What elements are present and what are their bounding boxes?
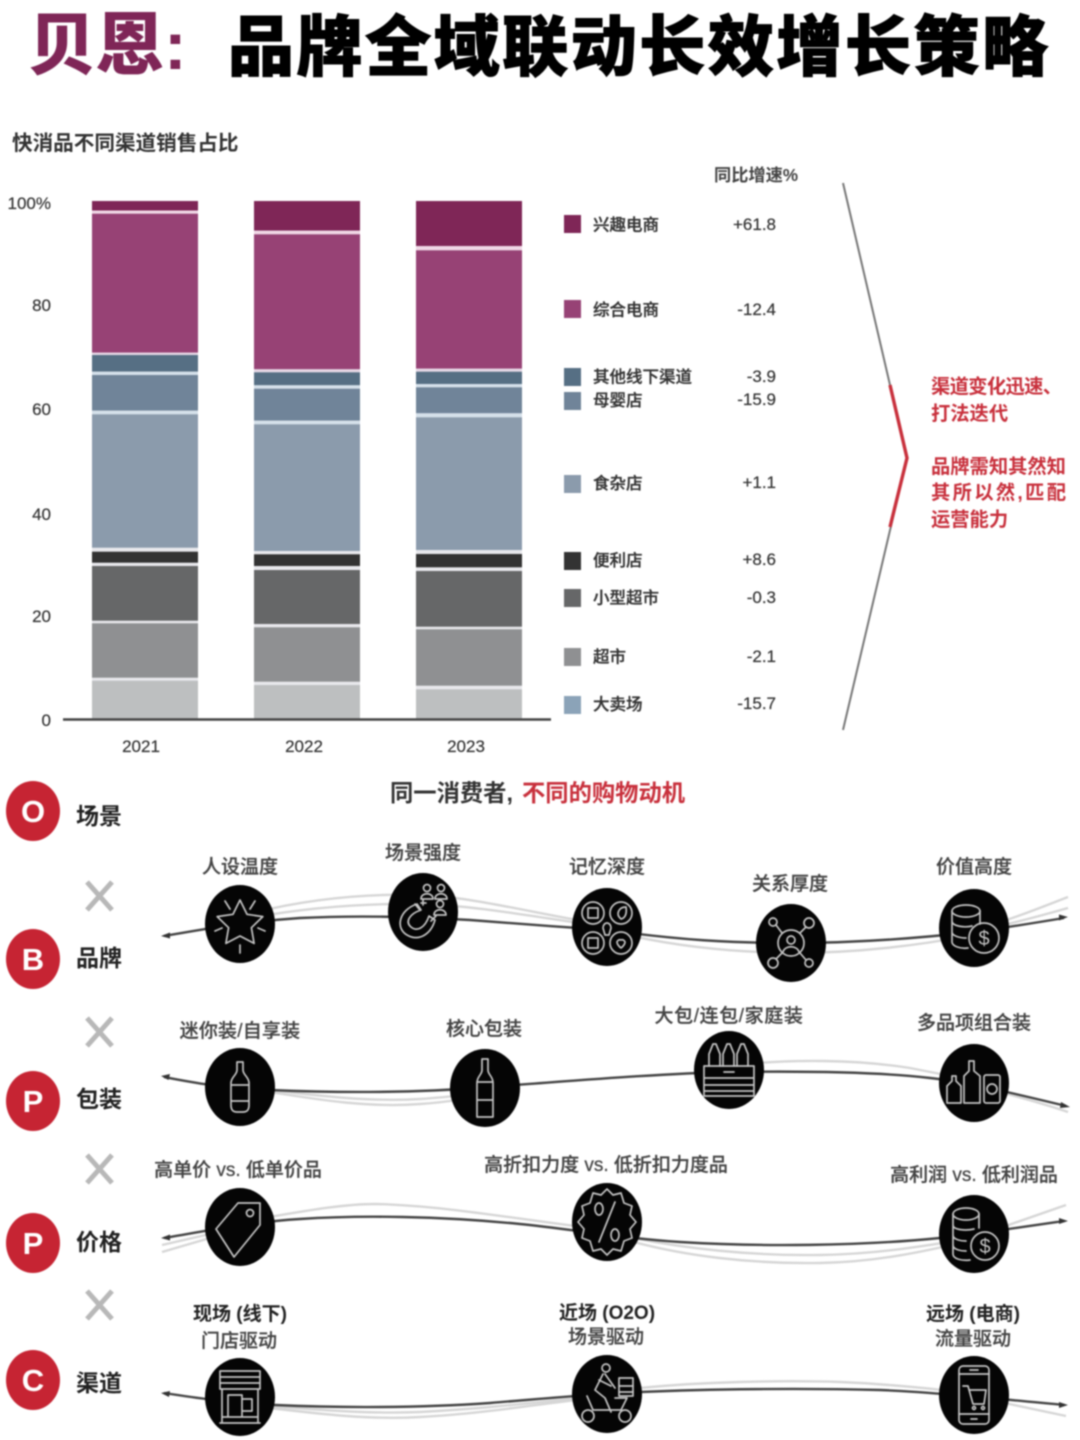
legend and growth rates: 其他线下渠道 xyxy=(593,368,692,386)
legend and growth rates: -15.7 xyxy=(737,694,776,713)
legend and growth rates: -0.3 xyxy=(747,588,776,607)
node: price tag xyxy=(154,1159,322,1266)
callout: 其所以然,匹配 xyxy=(931,481,1066,504)
node: memory depth xyxy=(569,856,645,966)
node: discount badge: 高折扣力度 vs. 低折扣力度品 xyxy=(484,1154,728,1176)
node: scene strength: 场景强度 xyxy=(385,842,461,864)
row: brand xyxy=(161,842,1068,982)
flow curves xyxy=(161,895,1068,953)
x axis: 2022 xyxy=(285,737,323,756)
legend and growth rates: 大卖场 xyxy=(593,695,642,714)
factor C: C xyxy=(22,1363,44,1398)
node: core pack xyxy=(446,1018,522,1127)
node: phone shopping cart: 远场 (电商) xyxy=(926,1303,1020,1325)
node: scene strength xyxy=(385,842,461,951)
node: mini pack: 迷你装/自享装 xyxy=(180,1020,300,1042)
factor O: 场景 xyxy=(76,803,122,829)
multiply mark xyxy=(87,1018,112,1046)
y axis labels: 100% xyxy=(8,194,51,213)
flow curves xyxy=(161,1061,1070,1112)
node: value height xyxy=(936,856,1012,967)
legend and growth rates: 同比增速% xyxy=(714,165,798,185)
multiply mark xyxy=(87,882,112,910)
node: delivery scooter: 场景驱动 xyxy=(568,1326,644,1348)
panel: OBPPC factor column xyxy=(6,781,122,1410)
node: relationship thickness xyxy=(752,873,828,982)
multiply mark xyxy=(87,1155,112,1183)
callout: 渠道变化迅速、 xyxy=(931,375,1062,398)
y axis labels: 80 xyxy=(32,296,51,315)
node: core pack: 核心包装 xyxy=(446,1018,522,1040)
node: profit coins xyxy=(890,1164,1058,1273)
title: 品牌全域联动长效增长策略 xyxy=(228,10,1048,84)
node: mini pack xyxy=(180,1020,300,1126)
factor C xyxy=(6,1350,122,1410)
factor P price: P xyxy=(23,1226,43,1261)
node: store xyxy=(193,1303,287,1436)
y axis labels: 60 xyxy=(32,400,51,419)
legend and growth rates: -15.9 xyxy=(737,390,776,409)
stacked bar 2022 xyxy=(254,201,360,719)
factor O: O xyxy=(21,794,45,829)
y axis labels: 40 xyxy=(32,505,51,524)
node: delivery scooter xyxy=(559,1302,655,1433)
factor P package xyxy=(6,1071,122,1131)
chart heading: 快消品不同渠道销售占比 xyxy=(12,132,239,155)
node: relationship thickness: 关系厚度 xyxy=(752,873,828,895)
y axis labels xyxy=(8,194,51,730)
legend and growth rates: 兴趣电商 xyxy=(593,216,659,234)
callout: 打法迭代 xyxy=(931,403,1008,425)
node: store: 门店驱动 xyxy=(201,1330,277,1352)
legend and growth rates: 综合电商 xyxy=(593,300,659,320)
node: persona warmth xyxy=(202,856,278,963)
y axis labels: 20 xyxy=(32,607,51,626)
node: value height: 价值高度 xyxy=(936,856,1012,878)
node: value height: $ xyxy=(978,928,990,950)
legend and growth rates: 超市 xyxy=(593,648,626,666)
y axis labels: 0 xyxy=(42,711,51,730)
factor B xyxy=(6,929,122,989)
factor P price: 价格 xyxy=(76,1229,122,1255)
legend and growth rates: -12.4 xyxy=(737,300,776,319)
callout xyxy=(931,375,1066,531)
node: profit coins: $ xyxy=(979,1236,991,1258)
flow curves xyxy=(161,1204,1068,1263)
node: price tag: 高单价 vs. 低单价品 xyxy=(154,1159,322,1181)
factor B: 品牌 xyxy=(76,945,122,971)
panel heading: shopping motive: 同一消费者, xyxy=(390,780,513,806)
callout: 品牌需知其然知 xyxy=(931,455,1066,478)
node: persona warmth: 人设温度 xyxy=(202,856,278,878)
legend and growth rates: +1.1 xyxy=(742,473,776,492)
flow curves xyxy=(161,1381,1068,1418)
stacked bar 2023 xyxy=(416,201,522,719)
bracket arrow xyxy=(843,183,907,730)
node: phone shopping cart xyxy=(926,1303,1020,1434)
row: package xyxy=(161,1005,1070,1127)
legend and growth rates: 食杂店 xyxy=(593,473,642,493)
legend and growth rates: +61.8 xyxy=(733,215,776,234)
node: store: 现场 (线下) xyxy=(193,1303,287,1325)
legend and growth rates: -2.1 xyxy=(747,647,776,666)
legend and growth rates xyxy=(564,165,798,714)
node: memory depth: 记忆深度 xyxy=(569,856,645,878)
node: family pack: 大包/连包/家庭装 xyxy=(655,1005,803,1027)
panel heading: shopping motive xyxy=(390,780,686,806)
node: phone shopping cart: 流量驱动 xyxy=(935,1328,1011,1350)
legend and growth rates: +8.6 xyxy=(742,550,776,569)
multiply mark xyxy=(87,1291,112,1319)
callout: 运营能力 xyxy=(931,509,1008,531)
node: profit coins: 高利润 vs. 低利润品 xyxy=(890,1164,1058,1186)
node: family pack xyxy=(655,1005,803,1109)
legend and growth rates: 小型超市 xyxy=(593,588,659,608)
node: delivery scooter: 近场 (O2O) xyxy=(559,1302,655,1324)
panel heading: shopping motive: 不同的购物动机 xyxy=(522,780,686,806)
panel: channel share chart xyxy=(8,132,1066,756)
title: 贝恩: xyxy=(28,8,187,84)
x axis: 2023 xyxy=(447,737,485,756)
legend and growth rates: 母婴店 xyxy=(593,391,642,410)
factor P package: 包装 xyxy=(76,1086,122,1112)
legend and growth rates: -3.9 xyxy=(747,367,776,386)
row: channel xyxy=(161,1302,1068,1436)
node: discount badge xyxy=(484,1154,728,1261)
stacked bar 2021 xyxy=(92,201,198,719)
legend and growth rates: 便利店 xyxy=(593,551,642,570)
factor C: 渠道 xyxy=(76,1370,122,1396)
factor B: B xyxy=(22,942,44,977)
x axis xyxy=(63,720,551,756)
row: price xyxy=(154,1154,1068,1273)
node: multi-item pack: 多品项组合装 xyxy=(917,1012,1031,1034)
node: multi-item pack xyxy=(917,1012,1031,1122)
x axis: 2021 xyxy=(122,737,160,756)
factor P package: P xyxy=(23,1084,43,1119)
factor O xyxy=(6,781,122,841)
factor P price xyxy=(6,1213,122,1273)
